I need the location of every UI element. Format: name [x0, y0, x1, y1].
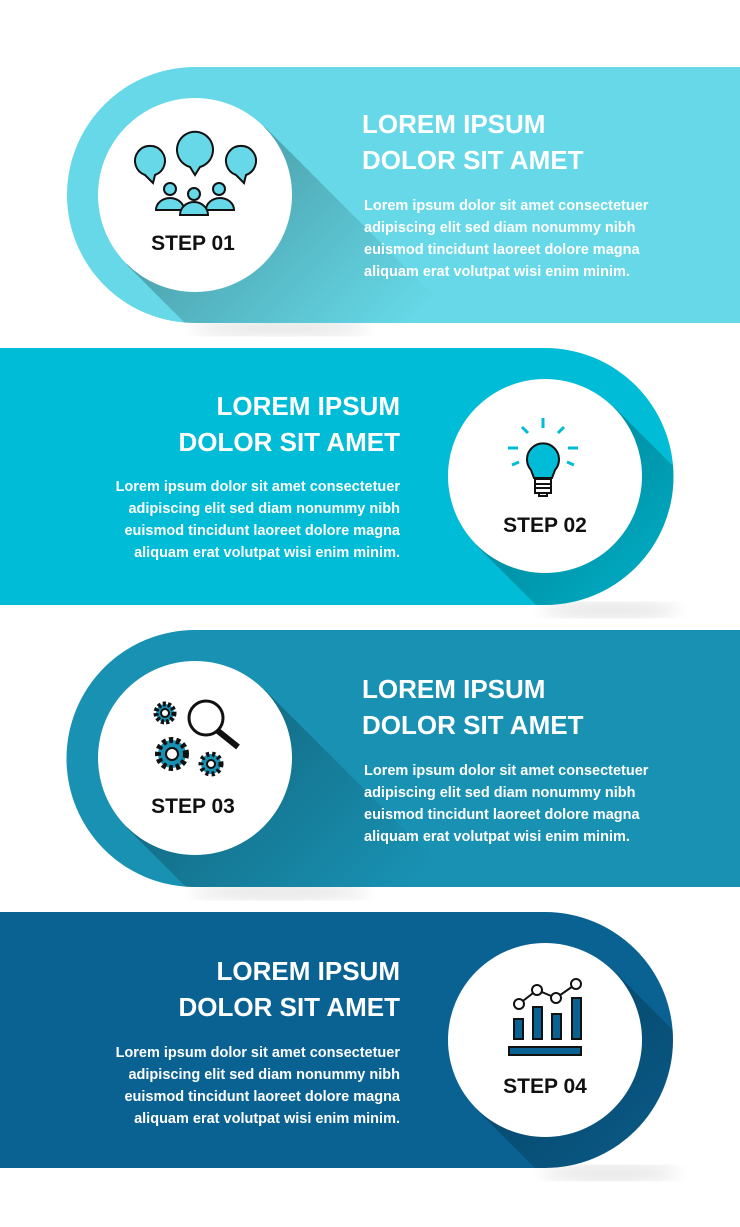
panel: step 04: adipiscing elit sed diam nonummy nibh: [128, 1067, 400, 1083]
panel: step 03: DOLOR SIT AMET: [362, 710, 584, 740]
panel: step 01: DOLOR SIT AMET: [362, 145, 584, 175]
step label 02: STEP 02: [503, 514, 587, 537]
text 01: Lorem ipsum dolor sit amet consectetuer: [364, 198, 649, 214]
text 02: Lorem ipsum dolor sit amet consectetuer: [116, 479, 400, 495]
panel: step 01: aliquam erat volutpat wisi enim minim.: [364, 264, 630, 280]
panel: step 01: [67, 67, 740, 336]
panel: step 03: adipiscing elit sed diam nonummy nibh: [364, 785, 636, 801]
panel: step 04: DOLOR SIT AMET: [179, 992, 400, 1022]
icon: light bulb: [508, 418, 578, 496]
panel: step 03: euismod tincidunt laoreet dolore magna: [364, 807, 640, 823]
step label 01: STEP 01: [151, 232, 235, 255]
panel: step 02: aliquam erat volutpat wisi enim minim.: [134, 545, 400, 561]
panel: step 04: euismod tincidunt laoreet dolore magna: [124, 1089, 401, 1105]
panel: step 02: [0, 348, 674, 618]
heading 02: LOREM IPSUM: [217, 391, 400, 421]
panel: step 01: adipiscing elit sed diam nonummy nibh: [364, 220, 636, 236]
panel: step 03: [66, 630, 740, 900]
text 03: Lorem ipsum dolor sit amet consectetuer: [364, 763, 649, 779]
panel: step 03: aliquam erat volutpat wisi enim minim.: [364, 829, 630, 845]
heading 01: LOREM IPSUM: [362, 109, 545, 139]
panel: step 02: adipiscing elit sed diam nonummy nibh: [128, 501, 400, 517]
panel: step 02: euismod tincidunt laoreet dolore magna: [124, 523, 401, 539]
step label 04: STEP 04: [503, 1075, 587, 1098]
step label 03: STEP 03: [151, 795, 235, 818]
heading 04: LOREM IPSUM: [217, 956, 400, 986]
icon: gears and magnifier: [156, 701, 238, 774]
panel: step 04: [0, 912, 673, 1182]
icon: bar chart: [509, 979, 581, 1055]
text 04: Lorem ipsum dolor sit amet consectetuer: [116, 1045, 400, 1061]
panel: step 04: aliquam erat volutpat wisi enim minim.: [134, 1111, 400, 1127]
panel: step 01: euismod tincidunt laoreet dolore magna: [364, 242, 640, 258]
icon: people talking: [135, 132, 256, 215]
heading 03: LOREM IPSUM: [362, 674, 545, 704]
panel: step 02: DOLOR SIT AMET: [179, 427, 400, 457]
